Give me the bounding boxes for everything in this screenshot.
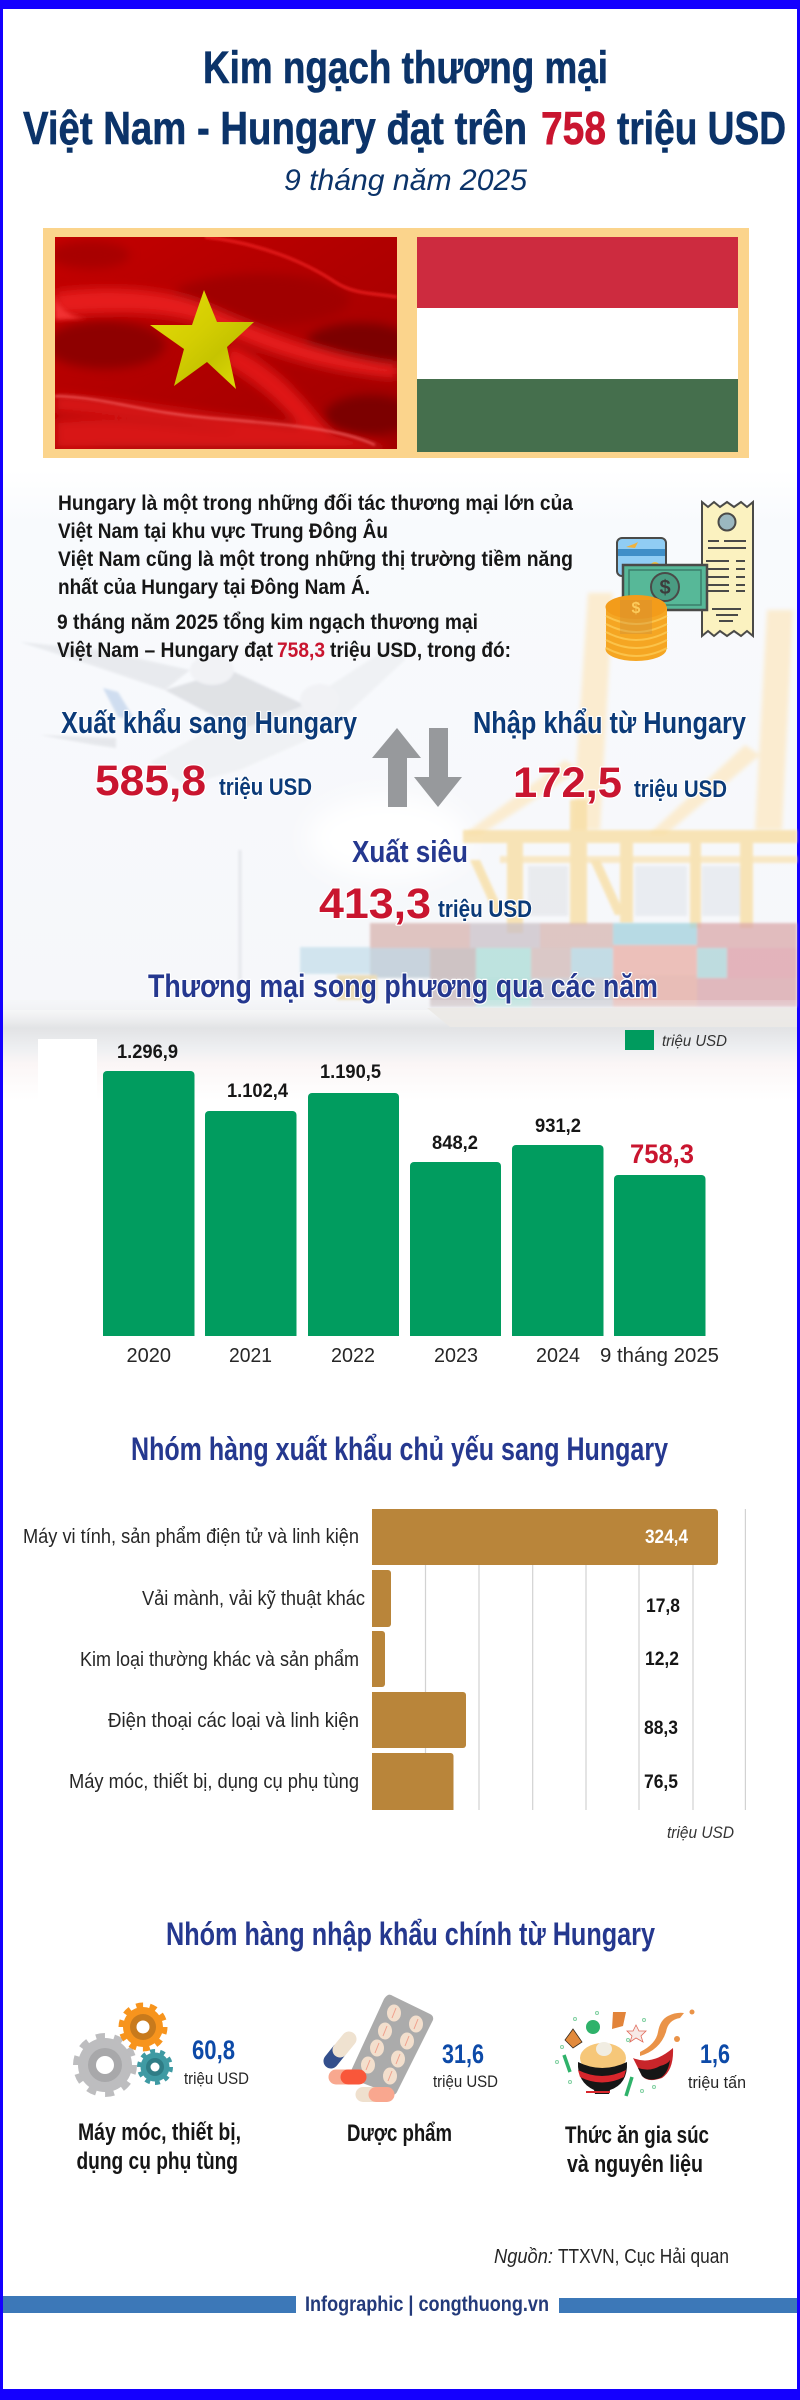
import item: machinery: dụng cụ phụ tùng [76, 2148, 238, 2175]
year labels [126, 1345, 719, 1367]
icon: yellow star [150, 290, 254, 389]
intro text: 9 tháng năm 2025 tổng kim ngạch thương mại [57, 611, 478, 634]
bar values [117, 1042, 694, 1169]
import item: animal feed: và nguyên liệu [567, 2151, 703, 2178]
category labels: Kim loại thường khác và sản phẩm [80, 1649, 359, 1671]
bar values: 1.102,4 [227, 1081, 288, 1102]
icon: food bowls [556, 2010, 694, 2096]
flag: Hungary [417, 237, 738, 452]
bar values: 12,2 [645, 1649, 679, 1670]
icon: receipt [702, 502, 753, 636]
stat: trade surplus: 413,3 [319, 880, 431, 928]
category labels: Điện thoại các loại và linh kiện [108, 1710, 359, 1732]
bar chart: main exports to Hungary [23, 1509, 745, 1842]
intro text: 758,3 [277, 639, 325, 662]
intro text: Việt Nam tại khu vực Trung Đông Âu [58, 519, 388, 543]
year labels: 2024 [536, 1345, 580, 1367]
heading: main imports: Nhóm hàng nhập khẩu chính từ Hungary [166, 1916, 655, 1952]
bar values: 76,5 [644, 1772, 678, 1793]
import item: machinery [76, 2005, 249, 2175]
flag: Vietnam [55, 237, 397, 449]
icon: bank card [617, 538, 666, 576]
stat: export: 585,8 [95, 757, 206, 805]
intro text: Việt Nam cũng là một trong những thị trường tiềm năng [58, 548, 573, 571]
stat: export: triệu USD [219, 774, 312, 801]
bars [103, 1071, 706, 1336]
icon: trade arrows [372, 728, 462, 807]
year labels: 2022 [331, 1345, 375, 1367]
icon: banknote: $ [659, 577, 671, 599]
import item: machinery: 60,8 [192, 2035, 235, 2065]
stat: import: 172,5 [513, 759, 622, 807]
year labels: 2021 [229, 1345, 272, 1367]
legend: triệu USD [662, 1033, 727, 1050]
bar values: 17,8 [646, 1596, 680, 1617]
source: Nguồn: [494, 2246, 553, 2268]
import item: animal feed: triệu tấn [688, 2073, 746, 2092]
import item: animal feed [556, 2010, 746, 2178]
icon: coin stack [606, 595, 667, 661]
category labels: Máy móc, thiết bị, dụng cụ phụ tùng [69, 1771, 359, 1793]
legend [625, 1030, 727, 1050]
stat: trade surplus [319, 834, 532, 928]
stat: import [473, 705, 747, 807]
source: TTXVN, Cục Hải quan [558, 2246, 729, 2268]
import item: pharmaceuticals: Dược phẩm [347, 2120, 452, 2147]
unit label: triệu USD [667, 1823, 734, 1842]
title: 758 [541, 102, 606, 154]
bar values: 931,2 [535, 1116, 581, 1137]
source [494, 2246, 729, 2268]
import item: machinery: triệu USD [184, 2069, 249, 2088]
stat: trade surplus: Xuất siêu [352, 834, 468, 869]
stat: trade surplus: triệu USD [438, 896, 532, 923]
bar values [644, 1527, 688, 1793]
icon: gears [76, 2005, 171, 2094]
intro text [57, 492, 573, 662]
year labels: 2023 [434, 1345, 478, 1367]
year labels: 2020 [126, 1345, 171, 1367]
stat: import: triệu USD [634, 776, 727, 803]
bars [372, 1509, 718, 1810]
title: Việt Nam - Hungary đạt trên [23, 102, 527, 154]
bar values: 88,3 [644, 1718, 678, 1739]
bar values: 848,2 [432, 1133, 478, 1154]
intro text: Việt Nam – Hungary đạt [57, 639, 273, 662]
import item: machinery: Máy móc, thiết bị, [78, 2119, 241, 2146]
title [23, 42, 786, 154]
heading: bilateral trade: Thương mại song phương qua các năm [148, 968, 658, 1004]
category labels: Máy vi tính, sản phẩm điện tử và linh kiện [23, 1526, 359, 1548]
import item: animal feed: 1,6 [700, 2039, 730, 2069]
background photo: plane and port [3, 470, 797, 1140]
panel: flags [43, 228, 749, 458]
subtitle: 9 tháng năm 2025 [284, 164, 527, 197]
heading: main exports: Nhóm hàng xuất khẩu chủ yếu sang Hungary [131, 1431, 668, 1467]
icon: banknote [623, 565, 707, 610]
footer band [3, 2293, 797, 2316]
icon: coin stack: $ [632, 600, 641, 617]
intro text: nhất của Hungary tại Đông Nam Á. [58, 576, 370, 599]
category labels: Vải mành, vải kỹ thuật khác [142, 1588, 365, 1610]
stat: import: Nhập khẩu từ Hungary [473, 705, 747, 740]
year labels: 9 tháng 2025 [600, 1345, 719, 1367]
intro text: Hungary là một trong những đối tác thương mại lớn của [58, 492, 573, 515]
bar values: 1.190,5 [320, 1062, 381, 1083]
bar values: 1.296,9 [117, 1042, 178, 1063]
bar values: 758,3 [630, 1139, 694, 1169]
icon: pills [331, 1995, 433, 2095]
import item: pharmaceuticals [331, 1995, 498, 2147]
import item: pharmaceuticals: 31,6 [442, 2039, 484, 2069]
intro text: triệu USD, trong đó: [330, 639, 511, 662]
category labels [23, 1526, 365, 1793]
stat: export [61, 705, 358, 805]
icon: receipt, card, money and coins [606, 502, 753, 661]
stat: export: Xuất khẩu sang Hungary [61, 705, 358, 740]
import item: pharmaceuticals: triệu USD [433, 2072, 498, 2091]
footer band: Infographic | congthuong.vn [305, 2293, 549, 2316]
bar values: 324,4 [645, 1527, 688, 1548]
bar chart: bilateral trade by year [103, 1030, 727, 1367]
import item: animal feed: Thức ăn gia súc [565, 2122, 709, 2149]
title: Kim ngạch thương mại [203, 42, 608, 93]
